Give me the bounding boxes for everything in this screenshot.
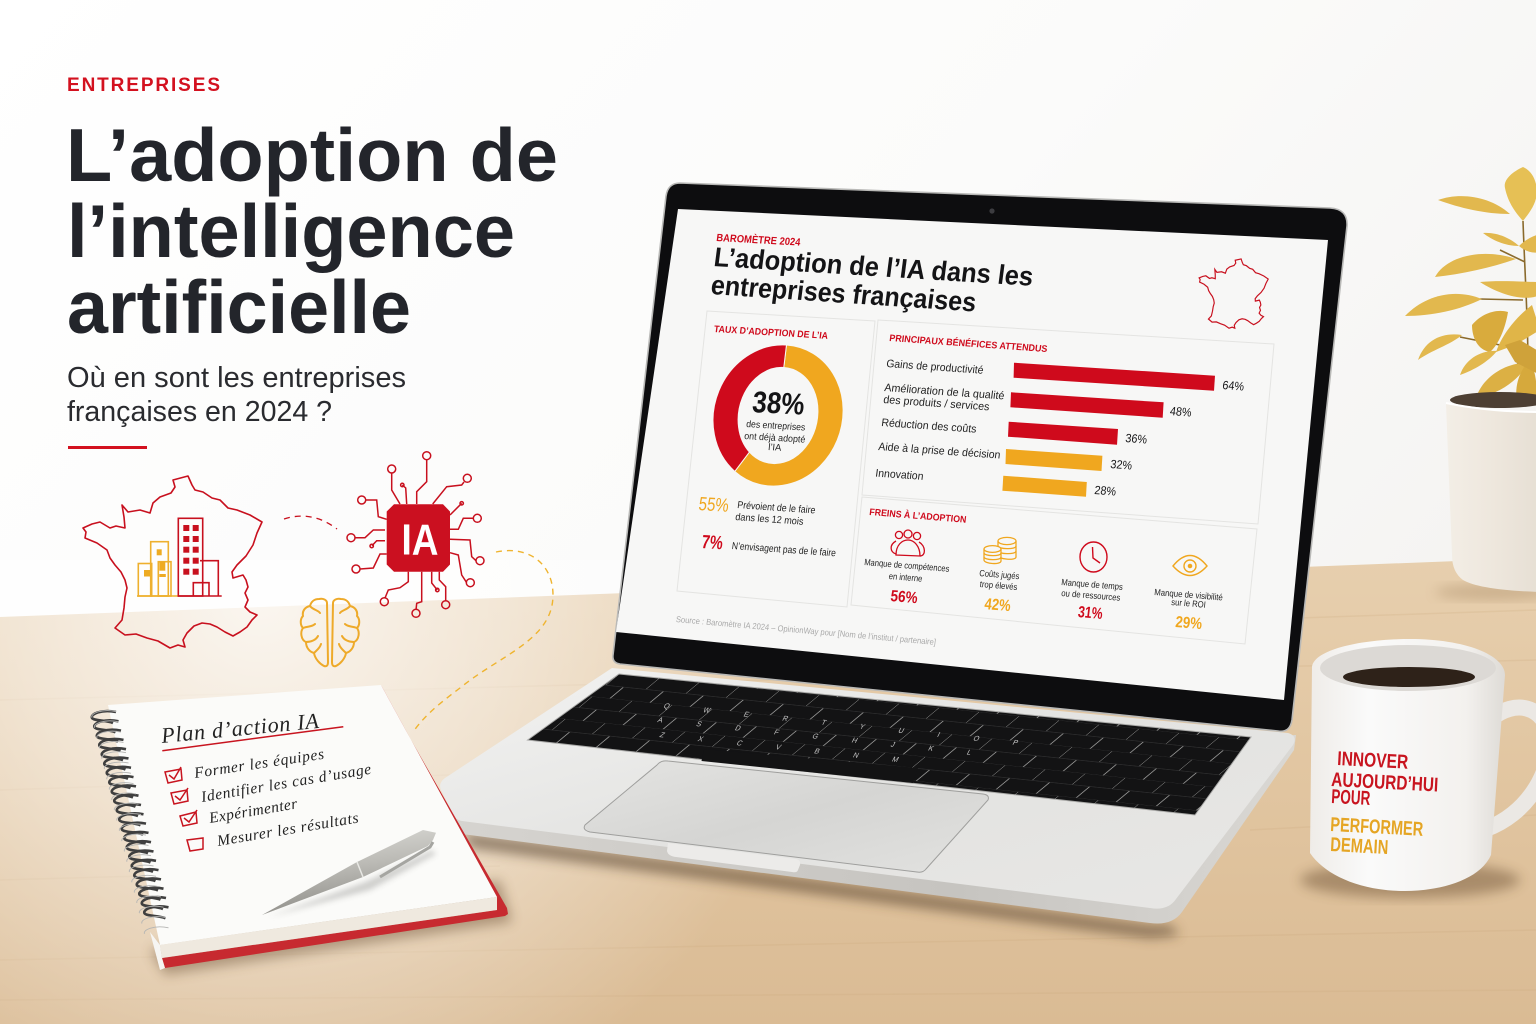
screen heading	[709, 231, 1035, 317]
barrier: time: 31%	[1077, 603, 1104, 623]
icon: red tower	[178, 518, 222, 596]
laptop base edge	[441, 735, 1296, 924]
checkboxes	[165, 767, 203, 851]
stat: 7%: N’envisagent pas de le faire	[731, 541, 837, 559]
barrier: skills: 56%	[890, 587, 919, 607]
bar values: 28%	[1094, 483, 1117, 499]
arrow: red dashed connector	[284, 516, 337, 529]
panel: adoption rate	[677, 311, 875, 607]
donut chart	[705, 341, 851, 490]
key labels: ZXCVBNM	[658, 730, 934, 767]
spiral binding	[92, 711, 168, 934]
barrier: skills: Manque de compétences	[864, 557, 950, 574]
icon: map of France with buildings	[83, 476, 262, 648]
bar values	[1094, 378, 1245, 499]
stat: 55%: Prévoient de le faire	[737, 500, 816, 516]
bar labels: Innovation	[875, 468, 924, 483]
bar chart	[1002, 363, 1215, 497]
barrier: skills	[864, 530, 950, 607]
pen body	[262, 830, 436, 915]
mug slogan: DEMAIN	[1330, 834, 1389, 859]
bar labels: Gains de productivité	[886, 358, 984, 377]
arrow: orange dashed connector	[413, 551, 553, 732]
donut centre text: 38%	[751, 386, 806, 422]
mug shadow	[1300, 862, 1520, 898]
bar values: 36%	[1125, 431, 1148, 447]
panel heading: PRINCIPAUX BÉNÉFICES ATTENDUS	[889, 333, 1048, 355]
checklist	[165, 746, 372, 851]
icon: orange buildings	[137, 542, 178, 596]
trackpad	[584, 761, 988, 872]
bar labels: Aide à la prise de décision	[878, 441, 1001, 462]
checklist: Expérimenter	[207, 795, 299, 827]
donut centre text: ont déjà adopté	[744, 431, 806, 446]
stat: 55%	[697, 494, 816, 528]
bar labels	[875, 358, 1005, 483]
plant leaves	[1405, 167, 1536, 402]
main title: artificielle	[67, 265, 411, 349]
icon: small map of France	[1196, 257, 1270, 330]
stat: 55%: dans les 12 mois	[735, 512, 804, 528]
webcam	[989, 208, 995, 214]
icon: clock	[1080, 542, 1107, 572]
bar values: 48%	[1169, 404, 1193, 420]
icon: IA chip	[347, 452, 484, 617]
notebook red cover	[162, 685, 508, 968]
subtitle	[67, 362, 406, 428]
plant pot	[1435, 392, 1536, 600]
subtitle: Où en sont les entreprises	[67, 362, 406, 394]
barrier: visibility: sur le ROI	[1171, 597, 1206, 610]
donut centre text: des entreprises	[746, 419, 806, 434]
donut centre text	[744, 386, 806, 454]
mug body	[1310, 639, 1505, 891]
keyboard	[528, 674, 1251, 815]
barrier: time	[1061, 542, 1124, 623]
main title: l’intelligence	[67, 189, 515, 273]
bar values: 64%	[1222, 378, 1245, 394]
pen clip	[380, 842, 433, 877]
source note: Source : Baromètre IA 2024 – OpinionWay pour [Nom de l’institut / partenaire]	[675, 614, 937, 647]
icon: coins	[984, 537, 1016, 564]
barrier: time: ou de ressources	[1061, 588, 1121, 603]
notebook heading: Plan d’action IA	[159, 708, 320, 748]
panel heading: TAUX D’ADOPTION DE L’IA	[713, 324, 829, 342]
notebook page edge	[160, 897, 497, 958]
plant	[1405, 167, 1536, 402]
checklist: Mesurer les résultats	[215, 810, 360, 850]
stat: 7%	[700, 532, 837, 559]
notebook shadow	[150, 880, 512, 975]
red accent rule	[68, 446, 147, 449]
panel: expected benefits	[862, 320, 1274, 524]
barrier: visibility: Manque de visibilité	[1154, 587, 1223, 602]
icon: eye	[1173, 556, 1207, 576]
barrier: costs	[979, 537, 1020, 615]
bar labels: Amélioration de la qualité	[884, 382, 1005, 402]
icon: people	[891, 530, 924, 556]
notebook page	[108, 685, 497, 945]
panel heading: FREINS À L’ADOPTION	[869, 507, 967, 526]
subtitle: françaises en 2024 ?	[67, 396, 332, 428]
mug slogan: AUJOURD’HUI	[1331, 769, 1439, 797]
stat: 55%: 55%	[697, 494, 730, 517]
bar labels: des produits / services	[883, 394, 991, 413]
notebook	[92, 685, 512, 975]
barrier: costs: trop élevés	[979, 579, 1018, 592]
screen heading: BAROMÈTRE 2024	[716, 231, 801, 249]
screen heading: L’adoption de l’IA dans les	[712, 241, 1035, 292]
barrier: time: Manque de temps	[1061, 577, 1124, 592]
screen heading: entreprises françaises	[709, 269, 978, 317]
barrier: visibility	[1154, 556, 1223, 633]
eyebrow: ENTREPRISES: ENTREPRISES	[67, 75, 220, 96]
trackpad notch	[667, 843, 800, 872]
notebook lower page strip	[150, 932, 165, 970]
laptop	[440, 183, 1347, 938]
checklist: Former les équipes	[192, 746, 325, 782]
heading block	[66, 75, 558, 449]
main title: L’adoption de	[66, 113, 558, 197]
plant stems	[1460, 221, 1528, 402]
barrier: skills: en interne	[888, 571, 923, 584]
mug handle	[1486, 708, 1536, 829]
bar labels: Réduction des coûts	[881, 417, 978, 436]
mug slogan: INNOVER	[1337, 748, 1409, 774]
barrier: visibility: 29%	[1175, 613, 1203, 633]
red underline	[162, 727, 343, 751]
key labels: ASDFGHJKL	[656, 715, 1008, 760]
key labels: QWERTYUIOP	[662, 701, 1054, 751]
mug interior	[1320, 645, 1496, 691]
icon: brain	[301, 599, 359, 666]
mug slogan: POUR	[1331, 786, 1371, 810]
bar values: 32%	[1110, 457, 1133, 473]
mug slogan	[1330, 748, 1439, 859]
wooden desk	[0, 558, 1536, 1024]
checklist: Identifier les cas d’usage	[199, 761, 372, 806]
laptop base top	[440, 668, 1295, 909]
stat: 7%: 7%	[700, 532, 724, 554]
barrier: costs: 42%	[984, 595, 1012, 615]
panel: barriers to adoption	[851, 497, 1257, 644]
mug slogan: PERFORMER	[1330, 814, 1424, 841]
main title	[66, 113, 558, 349]
pen shadow	[268, 850, 436, 917]
laptop screen	[616, 209, 1328, 700]
laptop contact shadow	[462, 832, 1180, 938]
coffee	[1343, 667, 1475, 687]
donut centre text: l’IA	[768, 442, 782, 454]
pen	[262, 830, 436, 917]
chip label: IA	[402, 515, 438, 564]
laptop lid bezel	[613, 183, 1347, 731]
keyboard space bar	[702, 749, 918, 783]
mug	[1300, 639, 1536, 898]
barrier: costs: Coûts jugés	[979, 568, 1020, 581]
